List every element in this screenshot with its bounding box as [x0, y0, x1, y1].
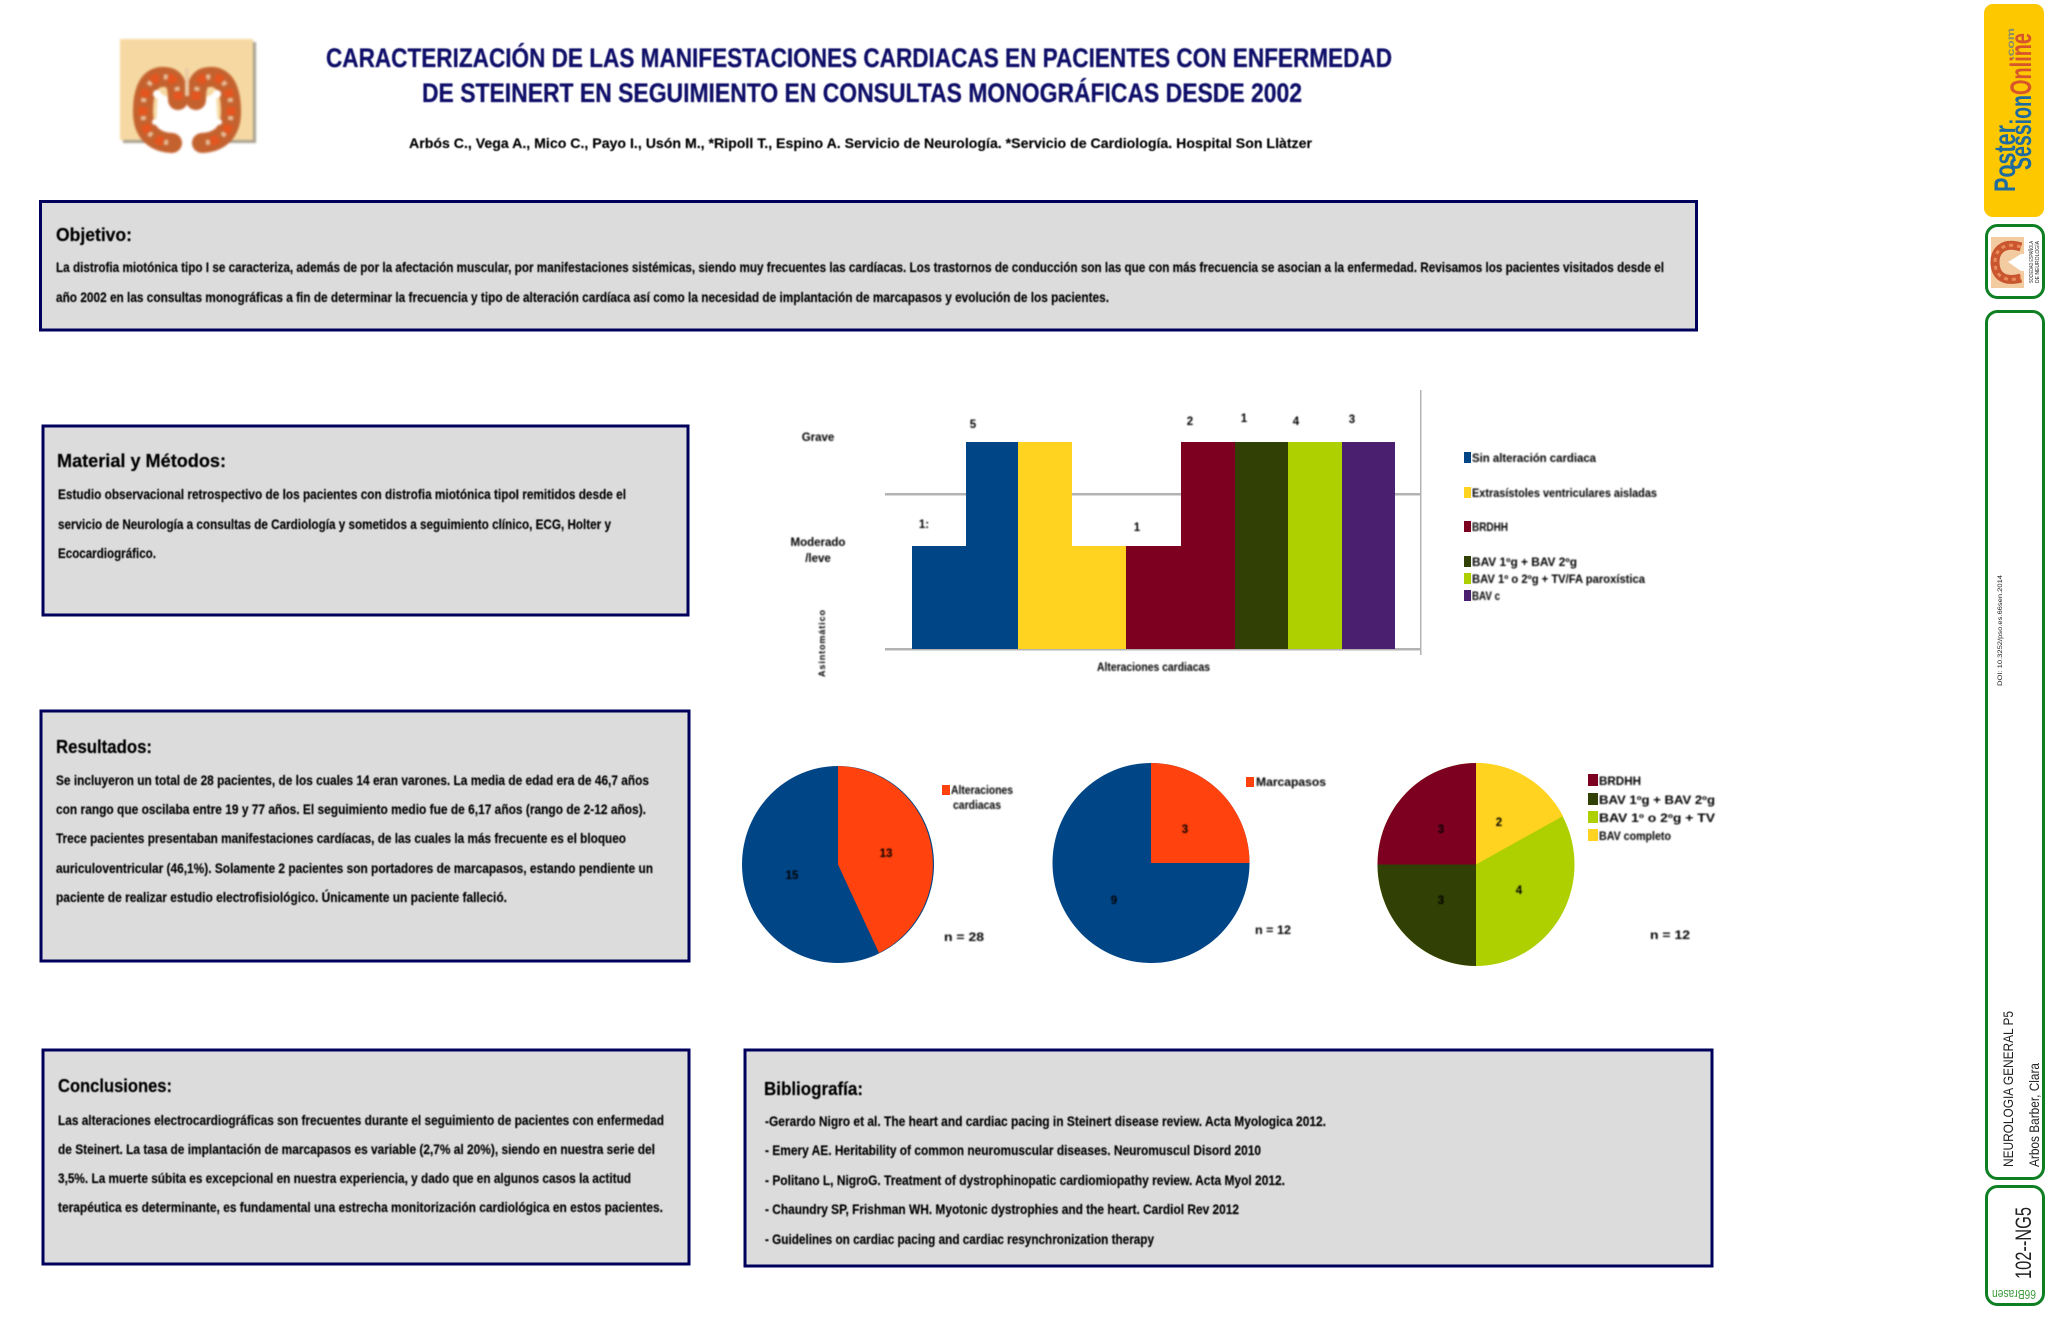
text: resultados: Trece pacientes presentaban manifestaciones cardíacas, de las cuales la más frecuente es el bloqueo — [56, 831, 626, 846]
legend: BAV completo — [1599, 831, 1671, 843]
text: references: - Emery AE. Heritability of common neuromuscular diseases. Neuromuscul Disord 2010 — [765, 1143, 1261, 1158]
data labels: 1 — [1241, 413, 1248, 425]
legend: Extrasístoles ventriculares aisladas — [1472, 488, 1657, 500]
bars — [912, 442, 1395, 649]
axis labels: /leve — [805, 553, 831, 565]
legend: BAV 1ºg + BAV 2ºg — [1472, 557, 1577, 569]
title: CARACTERIZACIÓN DE LAS MANIFESTACIONES CARDIACAS EN PACIENTES CON ENFERMEDAD — [326, 42, 1392, 73]
poster number: 102--NG5 — [2011, 1207, 2036, 1279]
icon: society brain logo — [120, 39, 256, 156]
pie chart: tipos de bloqueo: 4 — [1516, 885, 1523, 897]
sidebar: society logo box: DE NEUROLOGÍA — [2034, 240, 2041, 283]
text: references — [765, 1114, 1326, 1247]
axis labels: Moderado — [791, 537, 845, 549]
pie chart: alteraciones cardiacas — [742, 766, 1013, 963]
sidebar: poster session online badge: .com — [2006, 28, 2017, 60]
legend: BRDHH — [1599, 776, 1641, 788]
legend: BAV c — [1472, 591, 1501, 603]
legend: Sin alteración cardiaca — [1472, 453, 1597, 465]
sidebar: poster session online badge: Poster — [1989, 125, 2022, 192]
session name: NEUROLOGIA GENERAL P5 — [2000, 1011, 2016, 1167]
panel: bibliografía — [745, 1050, 1712, 1266]
sidebar: poster session online badge — [1984, 4, 2044, 217]
text: material y métodos — [58, 487, 626, 561]
text: material y métodos: Ecocardiográfico. — [58, 546, 156, 561]
legend — [1588, 774, 1715, 843]
sidebar: poster number box — [1986, 1186, 2044, 1304]
text: conclusiones: 3,5%. La muerte súbita es excepcional en nuestra experiencia, y dado que en algunos casos la actitud — [58, 1171, 631, 1186]
data labels: 5 — [970, 419, 977, 431]
data labels — [919, 413, 1355, 534]
pie chart: marcapasos: n = 12 — [1255, 925, 1291, 937]
text: references: - Guidelines on cardiac pacing and cardiac resynchronization therapy — [765, 1232, 1154, 1247]
heading: material y métodos: Material y Métodos: — [57, 451, 226, 471]
data labels: 2 — [1187, 416, 1193, 428]
text: resultados: Se incluyeron un total de 28 pacientes, de los cuales 14 eran varones. La media de edad era de 46,7 años — [56, 773, 649, 788]
legend: BAV 1ºg + BAV 2ºg — [1599, 795, 1715, 807]
pie chart: alteraciones cardiacas: 15 — [786, 870, 799, 882]
data labels: 1: — [919, 519, 929, 531]
pie chart: tipos de bloqueo: n = 12 — [1650, 930, 1690, 942]
panel: conclusiones — [43, 1050, 689, 1264]
data labels: 4 — [1293, 416, 1300, 428]
axis labels: Grave — [802, 432, 834, 444]
text: conclusiones — [58, 1113, 664, 1215]
text: conclusiones: terapéutica es determinante, es fundamental una estrecha monitorización cardiológica en estos pacientes. — [58, 1200, 663, 1215]
axis labels: Alteraciones cardiacas — [1097, 662, 1210, 674]
doi: DOI: 10.3252/pso.es.66sen.2014 — [1997, 575, 2004, 686]
panel: resultados — [41, 711, 689, 961]
legend: BAV 1º o 2ºg + TV — [1599, 813, 1715, 825]
sidebar: session and author box — [1986, 312, 2044, 1178]
sidebar: poster session online badge: Online — [2005, 33, 2038, 95]
text: material y métodos: servicio de Neurología a consultas de Cardiología y sometidos a seguimiento clínico, ECG, Holter y — [58, 517, 611, 532]
sidebar: society logo box — [1986, 226, 2044, 298]
text: references: - Chaundry SP, Frishman WH. Myotonic dystrophies and the heart. Cardiol Rev 2012 — [765, 1202, 1239, 1217]
panel: objetivo — [40, 202, 1696, 330]
pie chart: marcapasos — [1052, 763, 1326, 963]
bar chart: alteraciones cardiacas — [791, 390, 1657, 677]
author name: Arbos Barber, Clara — [2026, 1063, 2042, 1167]
pie chart: tipos de bloqueo: 2 — [1496, 817, 1502, 829]
axis labels: Asintomático — [817, 610, 827, 677]
pie chart: tipos de bloqueo: 3 — [1438, 824, 1444, 836]
heading: conclusiones: Conclusiones: — [58, 1076, 172, 1096]
legend: Marcapasos — [1256, 777, 1326, 789]
text: references: - Politano L, NigroG. Treatment of dystrophinopatic cardiomiopathy review. Acta Myol 2012. — [765, 1173, 1285, 1188]
sidebar: poster session online badge: Session — [2005, 95, 2038, 170]
text: objetivo: año 2002 en las consultas monográficas a fin de determinar la frecuencia y tipo de alteración cardíaca así como la necesidad de implantación de marcapasos y evolución de los pacientes. — [56, 290, 1109, 305]
data labels: 1 — [1134, 522, 1141, 534]
pie chart: alteraciones cardiacas: n = 28 — [944, 932, 985, 944]
pie chart: tipos de bloqueo — [1378, 763, 1715, 966]
pie chart: alteraciones cardiacas: 13 — [880, 848, 892, 860]
congress label: 66Brasen — [1992, 1287, 2036, 1302]
text: references: -Gerardo Nigro et al. The heart and cardiac pacing in Steinert disease review. Acta Myologica 2012. — [765, 1114, 1326, 1129]
heading: bibliografía: Bibliografía: — [764, 1079, 863, 1099]
authors: Arbós C., Vega A., Mico C., Payo I., Usón M., *Ripoll T., Espino A. Servicio de Neurología. *Servicio de Cardiología. Hospital Son Llàtzer — [409, 136, 1313, 151]
legend — [942, 785, 1013, 812]
title — [326, 42, 1392, 108]
data labels: 3 — [1349, 414, 1355, 426]
title: DE STEINERT EN SEGUIMIENTO EN CONSULTAS MONOGRÁFICAS DESDE 2002 — [422, 77, 1302, 108]
legend: BAV 1º o 2ºg + TV/FA paroxística — [1472, 574, 1646, 586]
text: objetivo — [56, 260, 1664, 305]
legend: Alteraciones — [951, 785, 1013, 797]
text: resultados: con rango que oscilaba entre 19 y 77 años. El seguimiento medio fue de 6,17 años (rango de 2-12 años). — [56, 802, 646, 817]
heading: objetivo: Objetivo: — [56, 225, 132, 245]
text: objetivo: La distrofia miotónica tipo I se caracteriza, además de por la afectación muscular, por manifestaciones sistémicas, siendo muy frecuentes las cardíacas. Los trastornos de conducción son las que con más frecuencia se asocian a la enfermedad. Revisamos los pacientes visitados desde el — [56, 260, 1664, 275]
legend: cardiacas — [953, 800, 1001, 812]
sidebar: society logo box: SOCIEDAD ESPAÑOLA — [2028, 240, 2035, 283]
axis labels — [791, 432, 1210, 677]
text: conclusiones: de Steinert. La tasa de implantación de marcapasos es variable (2,7% al 20%), siendo en nuestra serie del — [58, 1142, 655, 1157]
legend: BRDHH — [1472, 522, 1508, 534]
heading: resultados: Resultados: — [56, 737, 152, 757]
text: resultados — [56, 773, 653, 905]
legend — [1464, 452, 1657, 603]
pie chart: tipos de bloqueo: 3 — [1438, 895, 1444, 907]
text: material y métodos: Estudio observacional retrospectivo de los pacientes con distrofia miotónica tipoI remitidos desde el — [58, 487, 626, 502]
text: conclusiones: Las alteraciones electrocardiográficas son frecuentes durante el seguimiento de pacientes con enfermedad — [58, 1113, 664, 1128]
pie chart: marcapasos: 9 — [1111, 895, 1117, 907]
text: resultados: auriculoventricular (46,1%). Solamente 2 pacientes son portadores de marcapasos, estando pendiente un — [56, 861, 653, 876]
panel: material y métodos — [43, 426, 688, 615]
text: resultados: paciente de realizar estudio electrofisiológico. Únicamente un paciente falleció. — [56, 890, 507, 905]
pie chart: marcapasos: 3 — [1182, 824, 1188, 836]
